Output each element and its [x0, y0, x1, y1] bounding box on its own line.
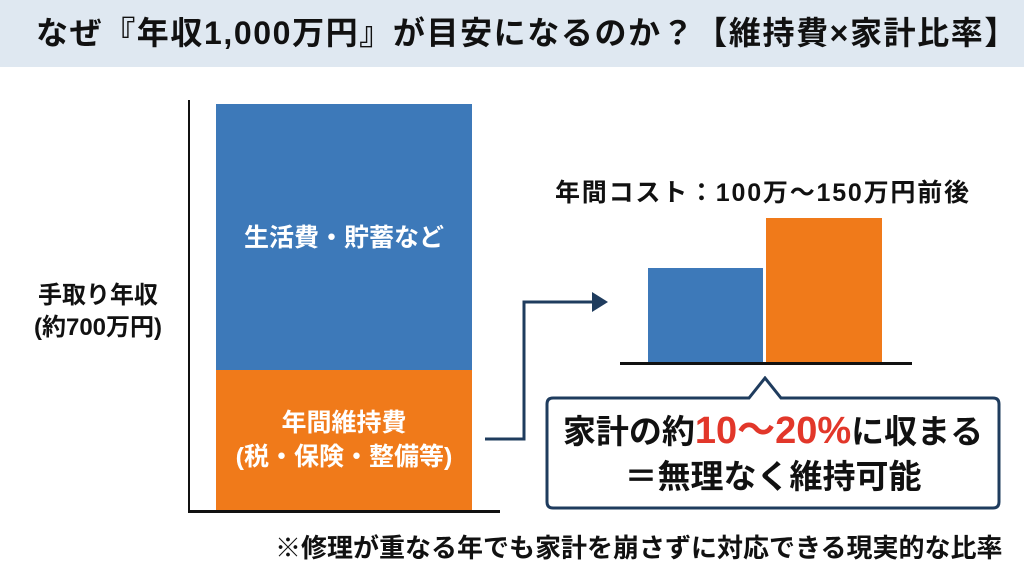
axes [188, 100, 190, 512]
callout [546, 376, 1000, 510]
arrow [485, 292, 608, 440]
callout text: 家計の約10〜20%に収まる [563, 410, 983, 452]
y axis label: 手取り年収 [38, 282, 158, 309]
callout text: ＝無理なく維持可能 [624, 458, 922, 495]
y axis label [34, 282, 162, 341]
bar segment: maintenance: (税・保険・整備等) [236, 443, 452, 471]
title: なぜ『年収1,000万円』が目安になるのか？【維持費×家計比率】 [36, 15, 1018, 51]
right bar chart [620, 218, 912, 365]
y axis label: (約700万円) [34, 314, 162, 341]
bar segment: living costs: 生活費・貯蓄など [244, 224, 444, 252]
bar segment: maintenance [216, 370, 472, 510]
bar: 150万 [766, 218, 882, 364]
bar segment: maintenance: 年間維持費 [281, 409, 406, 437]
footnote: ※修理が重なる年でも家計を崩さずに対応できる現実的な比率 [275, 533, 1002, 563]
callout text [563, 410, 983, 495]
right chart label: 年間コスト：100万〜150万円前後 [555, 179, 971, 207]
title bar [0, 0, 1024, 67]
bar: 100万 [648, 268, 763, 364]
bar segment: living costs [216, 104, 472, 370]
left stacked bar chart [188, 100, 500, 513]
